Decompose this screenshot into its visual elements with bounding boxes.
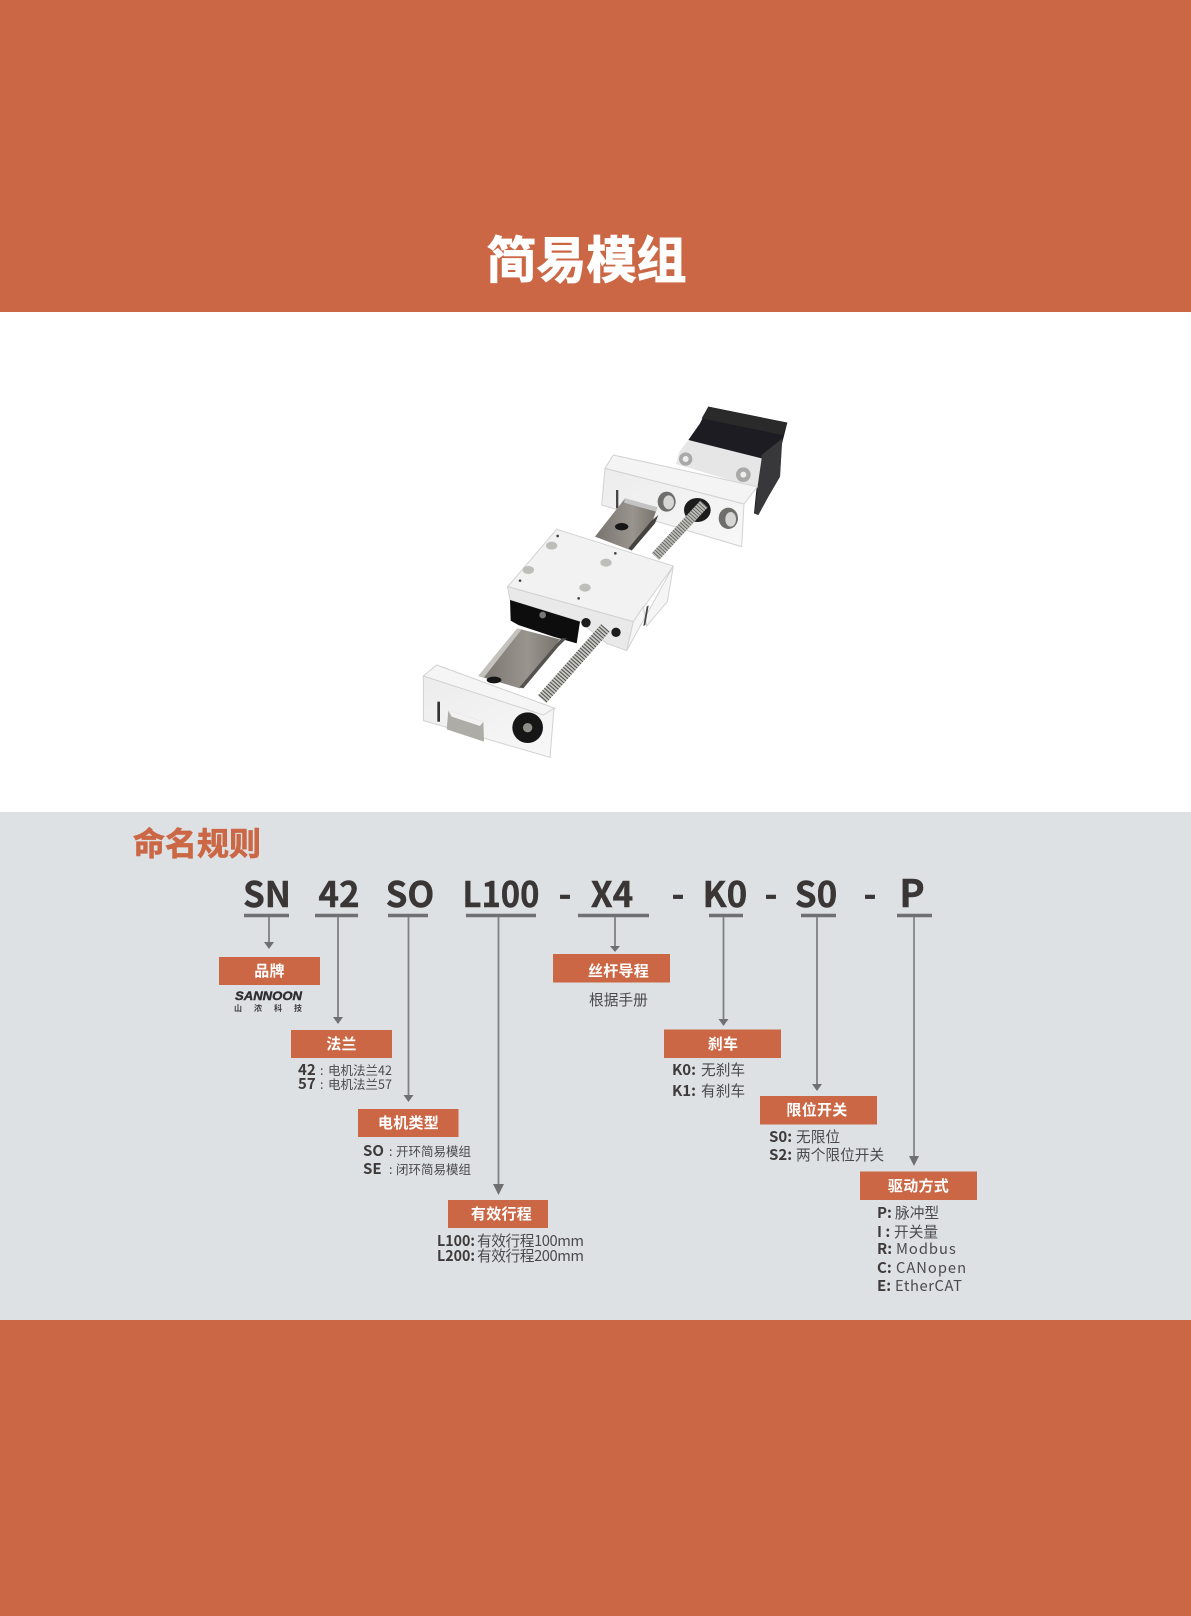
brand logo: SANNOON: [235, 989, 302, 1003]
arrow: S0 to limit switch: [812, 917, 822, 1091]
brand logo: [234, 989, 302, 1014]
motor type options: SE: [363, 1158, 382, 1179]
model code letters: -: [559, 867, 571, 918]
carriage: [508, 529, 673, 651]
drive mode options: Modbus: [896, 1238, 957, 1259]
motor type options: SO: [363, 1140, 384, 1161]
label: limit switch: 限位开关: [786, 1099, 848, 1120]
limit switch options: 两个限位开关: [796, 1144, 884, 1165]
brake options: [672, 1059, 745, 1101]
front lead screw: [542, 628, 605, 699]
brand logo: 山浓科技: [234, 1003, 302, 1014]
drive mode options: C:: [877, 1257, 892, 1278]
label: drive mode: 驱动方式: [888, 1175, 949, 1196]
motor type options: 开环简易模组: [396, 1141, 471, 1160]
arrow: 42 to flange: [333, 917, 343, 1024]
model code letters: SN: [243, 867, 291, 918]
flange options: 42: [298, 1059, 316, 1080]
flange options: 57: [298, 1073, 316, 1094]
label: motor type: [358, 1109, 471, 1179]
model code letters: -: [864, 867, 876, 918]
drive mode options: P:: [877, 1202, 892, 1223]
header band: [0, 0, 1191, 312]
label: effective stroke: [437, 1200, 584, 1266]
label: brake: 刹车: [708, 1033, 738, 1054]
model code letters: -: [672, 867, 684, 918]
drive mode options: 脉冲型: [895, 1202, 939, 1223]
flange options: [298, 1059, 392, 1094]
label: flange: [291, 1030, 392, 1094]
drive mode options: R:: [877, 1238, 892, 1259]
pitch note: 根据手册: [589, 989, 648, 1010]
drive mode options: CANopen: [896, 1257, 967, 1278]
model code letters: K0: [703, 867, 747, 918]
footer band: [0, 1320, 1191, 1616]
label: drive mode: [860, 1172, 977, 1296]
limit switch options: [769, 1126, 884, 1165]
drive mode options: 开关量: [894, 1221, 938, 1242]
model code letters: S0: [795, 867, 837, 918]
rear end block: [602, 455, 757, 547]
limit switch options: S0:: [769, 1126, 792, 1147]
drive mode options: [877, 1202, 967, 1296]
model code letters: SO: [386, 867, 434, 918]
label: effective stroke: 有效行程: [471, 1203, 532, 1224]
stroke options: L200:: [437, 1245, 475, 1266]
stroke options: L100:: [437, 1230, 475, 1251]
label: brake: [664, 1030, 781, 1101]
stroke options: [437, 1230, 584, 1266]
drive mode options: I :: [877, 1221, 890, 1242]
model code letters: [243, 863, 925, 918]
product photo: linear module: [423, 407, 787, 757]
front rail: [478, 628, 567, 688]
motor type options: [363, 1140, 471, 1179]
panel heading: 命名规则: [133, 819, 261, 865]
arrow: X4 to lead: [610, 917, 620, 952]
carriage black slider: [510, 600, 621, 643]
naming rules panel: [0, 812, 1191, 1320]
drive mode options: EtherCAT: [895, 1275, 963, 1296]
flange options: :: [320, 1060, 323, 1079]
model code letters: L100: [462, 867, 540, 918]
model code letters: P: [899, 863, 925, 918]
model code letters: X4: [591, 867, 633, 918]
label: lead screw pitch: [553, 954, 670, 1010]
arrow: SN to brand: [264, 917, 274, 949]
brake options: K1:: [672, 1080, 696, 1101]
motor type options: :: [389, 1141, 392, 1160]
drive mode options: E:: [877, 1275, 891, 1296]
flange options: 电机法兰57: [328, 1074, 392, 1093]
motor type options: 闭环简易模组: [396, 1159, 471, 1178]
arrow: SO to motor type: [404, 917, 414, 1102]
motor: [676, 407, 787, 515]
label: limit switch: [760, 1096, 884, 1165]
motor type options: :: [389, 1159, 392, 1178]
stroke options: 有效行程100mm: [477, 1230, 584, 1251]
stroke options: 有效行程200mm: [477, 1245, 584, 1266]
label: brand: [219, 957, 320, 1014]
label: lead screw pitch: 丝杆导程: [588, 960, 649, 981]
label: flange: 法兰: [326, 1033, 357, 1054]
rear lead screw: [655, 504, 704, 557]
arrow: L100 to stroke: [493, 917, 504, 1195]
brake options: 无刹车: [701, 1059, 745, 1080]
brake options: K0:: [672, 1059, 696, 1080]
flange options: :: [320, 1074, 323, 1093]
flange options: 电机法兰42: [328, 1060, 392, 1079]
limit switch options: S2:: [769, 1144, 792, 1165]
arrow: K0 to brake: [718, 917, 728, 1026]
limit switch options: 无限位: [796, 1126, 840, 1147]
arrow: P to drive mode: [909, 917, 919, 1166]
model code letters: -: [765, 867, 777, 918]
model code letters: 42: [318, 867, 360, 918]
code underlines: [244, 914, 932, 917]
front end plate: [423, 665, 555, 757]
rear rail: [595, 498, 658, 551]
title: 简易模组: [486, 221, 686, 293]
label: motor type: 电机类型: [378, 1112, 439, 1133]
label: brand: 品牌: [254, 960, 285, 981]
brake options: 有刹车: [701, 1080, 745, 1101]
